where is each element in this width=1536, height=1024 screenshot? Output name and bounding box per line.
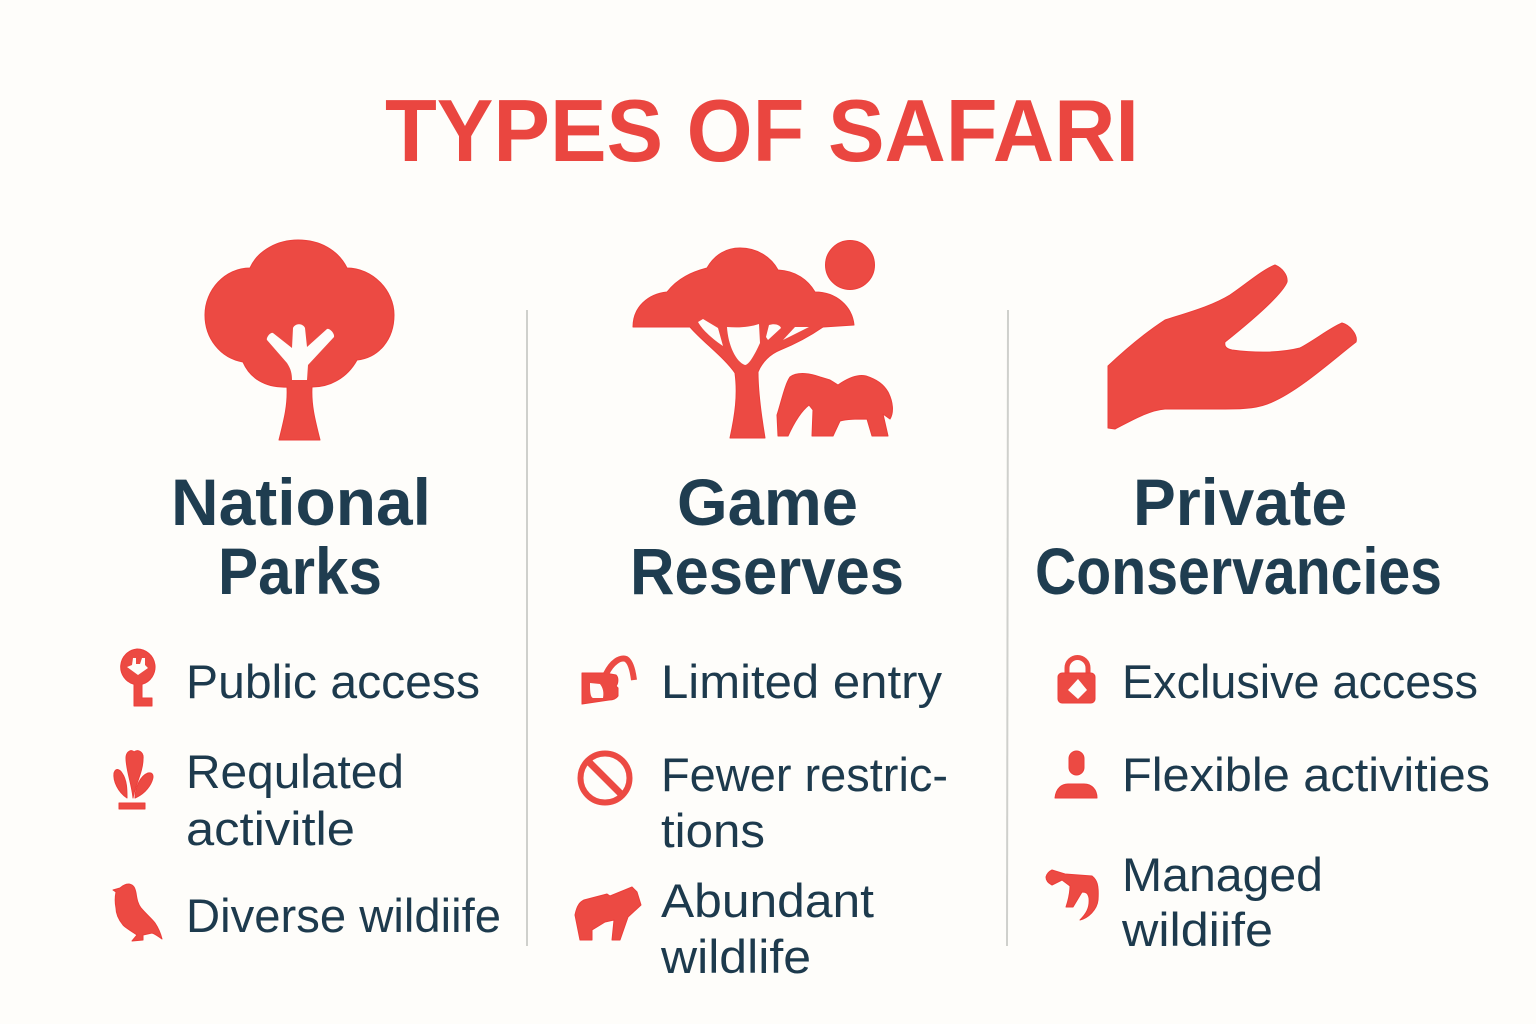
text: managed wildlife: Managed [1122, 848, 1323, 901]
icon: open hand [1108, 265, 1356, 429]
icon: public access key [121, 649, 155, 706]
icon: elephant [777, 374, 892, 436]
panel: national parks [113, 240, 501, 942]
text: exclusive access: Exclusive access [1122, 655, 1478, 708]
heading: Private Conservancies: Conservancies [1035, 534, 1442, 608]
text: limited entry: Limited entry [661, 655, 943, 708]
text: public access: Public access [186, 655, 480, 708]
text: fewer restrictions [661, 748, 948, 857]
icon: animal [1046, 870, 1098, 920]
text: fewer restrictions: Fewer restric- [661, 748, 948, 801]
text: flexible activities: Flexible activities [1122, 748, 1490, 801]
icon: acacia tree [633, 248, 854, 438]
title: TYPES OF SAFARI [385, 81, 1139, 180]
icon: open padlock [582, 659, 634, 704]
text: fewer restrictions: tions [661, 804, 765, 857]
heading: National Parks [171, 465, 431, 608]
text: abundant wildlife [660, 874, 874, 983]
icon: regulated plant [114, 751, 153, 809]
icon: round tree [205, 240, 394, 440]
icon: person [1055, 751, 1097, 798]
icon: sun [826, 240, 874, 290]
text: abundant wildlife: wildlife [660, 930, 811, 983]
icon: closed padlock [1058, 658, 1095, 703]
heading: Game Reserves: Reserves [630, 534, 904, 608]
heading: National Parks: National [171, 465, 431, 539]
heading: Private Conservancies: Private [1133, 465, 1347, 539]
icon: bird [113, 884, 162, 941]
icon: prohibited sign [580, 754, 630, 802]
text: diverse wildlife: Diverse wildiife [186, 889, 501, 942]
heading: Game Reserves [630, 465, 904, 608]
icon: gorilla-shaped animal [575, 887, 641, 940]
heading: National Parks: Parks [218, 534, 382, 608]
text: managed wildlife: wildiife [1121, 903, 1273, 956]
text: managed wildlife [1121, 848, 1323, 956]
panel: private conservancies [1035, 265, 1490, 956]
heading: Private Conservancies [1035, 465, 1442, 608]
text: regulated activities: activitle [186, 802, 355, 855]
heading: Game Reserves: Game [677, 465, 858, 539]
text: regulated activities [186, 745, 404, 855]
text: abundant wildlife: Abundant [661, 874, 874, 927]
text: regulated activities: Requlated [186, 745, 404, 798]
icon: acacia tree, sun and elephant [633, 240, 892, 438]
panel: game reserves [575, 240, 948, 983]
